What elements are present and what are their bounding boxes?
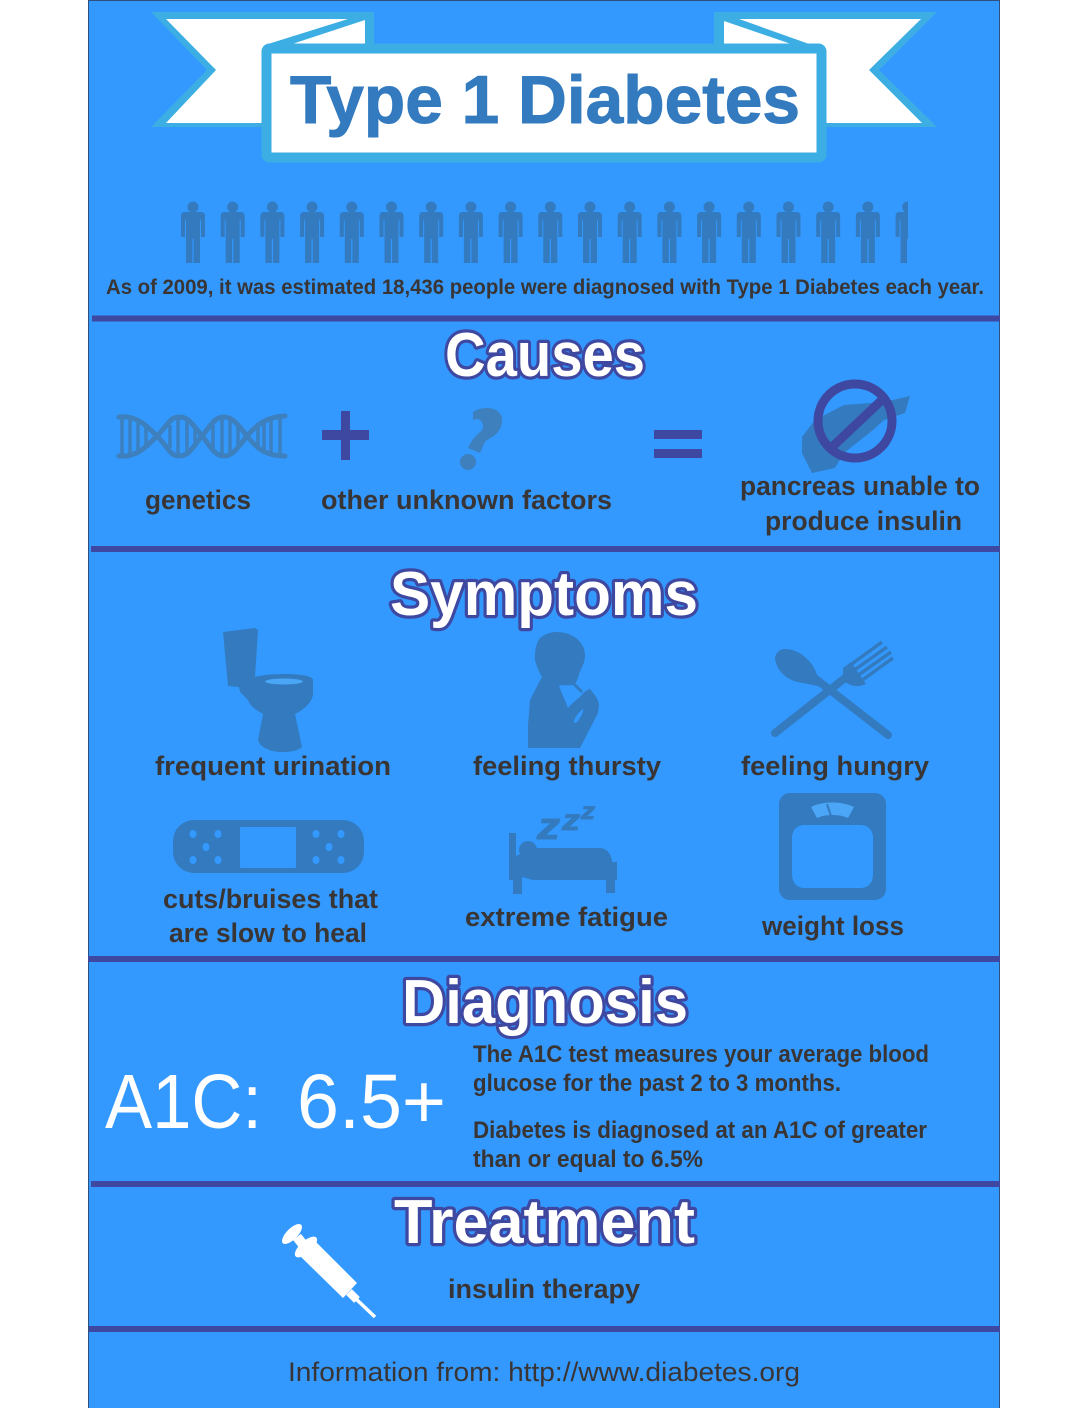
stat: a1c value: A1C: [105, 1059, 262, 1145]
text: a1c explanation: The A1C test measures your average blood [473, 1041, 929, 1068]
heading: symptoms: Symptoms [390, 560, 698, 629]
stat: a1c value: 6.5+ [297, 1059, 446, 1145]
section: symptoms [155, 560, 929, 948]
equals sign [654, 430, 702, 458]
heading: diagnosis: Diagnosis [402, 968, 688, 1037]
icon: pancreas with prohibition sign [802, 384, 910, 473]
icon: spoon and fork [775, 642, 893, 735]
text: a1c explanation: glucose for the past 2 to 3 months. [473, 1070, 841, 1097]
statistic text: As of 2009, it was estimated 18,436 people were diagnosed with Type 1 Diabetes each year. [106, 276, 984, 299]
label: feeling hungry: feeling hungry [741, 751, 929, 781]
label: weight loss: weight loss [761, 911, 904, 941]
icon: sleeping in bed [509, 798, 617, 894]
icon: child drinking [528, 632, 599, 748]
icon: bandage [173, 820, 364, 873]
label: cuts and bruises: are slow to heal [169, 918, 367, 948]
label: frequent urination: frequent urination [155, 751, 391, 781]
text: a1c explanation [473, 1041, 929, 1173]
banner right tail [714, 12, 937, 127]
icon: sleeping in bed: z [561, 804, 580, 837]
label: feeling thirsty: feeling thursty [473, 751, 661, 781]
section: causes [119, 321, 980, 536]
label: insulin therapy: insulin therapy [448, 1274, 640, 1304]
banner left tail [151, 12, 374, 127]
label: cuts and bruises: cuts/bruises that [163, 884, 378, 914]
title: Type 1 Diabetes [290, 62, 800, 138]
title banner [151, 12, 937, 158]
icon: dna [119, 416, 285, 456]
banner main panel [266, 48, 822, 158]
label: pancreas: pancreas unable to [740, 471, 980, 501]
icon: syringe [279, 1221, 375, 1317]
text: a1c explanation: Diabetes is diagnosed at an A1C of greater [473, 1117, 927, 1144]
section: diagnosis [105, 968, 929, 1173]
icon: weight scale [779, 793, 886, 900]
label: extreme fatigue: extreme fatigue [465, 902, 668, 932]
heading: causes: Causes [445, 321, 645, 390]
label: other unknown factors: other unknown factors [321, 485, 612, 515]
label: genetics: genetics [145, 485, 251, 515]
icon: question mark [460, 408, 502, 470]
icon: sleeping in bed: z [536, 806, 560, 848]
plus sign [322, 411, 369, 460]
icon: sleeping in bed: z [580, 798, 596, 824]
icon: toilet [223, 628, 313, 752]
section: treatment [279, 1188, 695, 1317]
heading: treatment: Treatment [394, 1188, 695, 1257]
stat: a1c value [105, 1059, 446, 1145]
label: cuts and bruises [163, 884, 378, 948]
icon row: people [181, 202, 920, 263]
text: a1c explanation: than or equal to 6.5% [473, 1146, 703, 1173]
label: pancreas: produce insulin [765, 506, 962, 536]
source footer: Information from: http://www.diabetes.org [288, 1357, 800, 1387]
label: pancreas [740, 471, 980, 536]
